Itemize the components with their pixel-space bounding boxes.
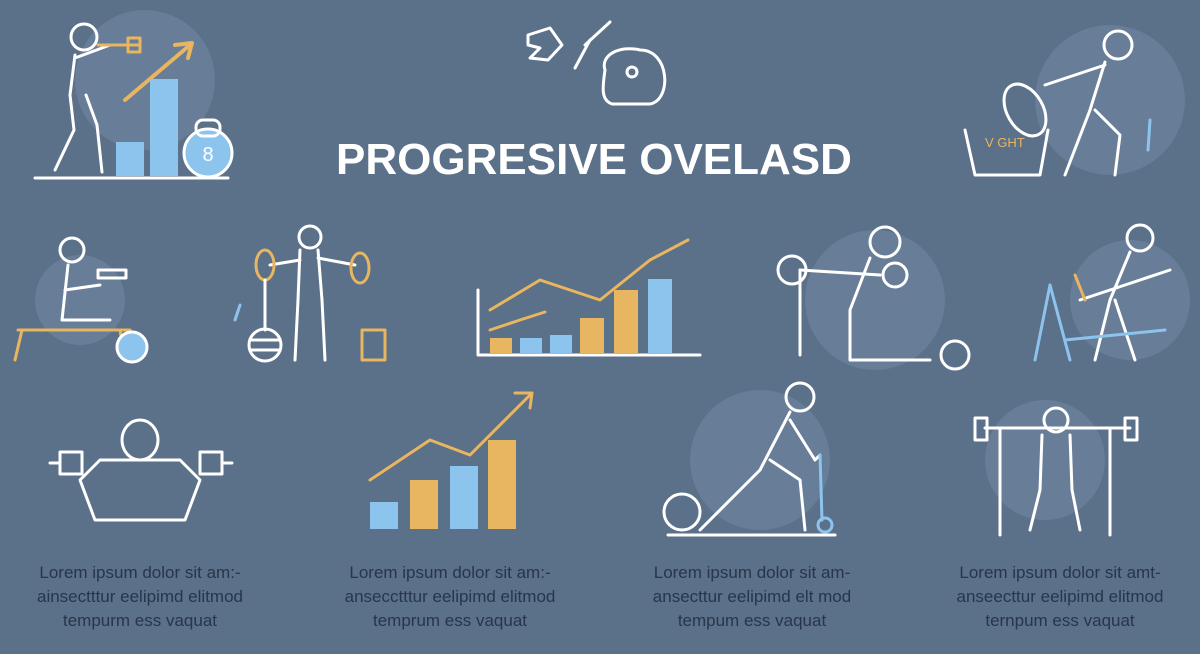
- text block 4: [957, 563, 1163, 630]
- text block 1: tempurm ess vaquat: [63, 611, 217, 630]
- icon: top center scribbles: [528, 22, 665, 104]
- text block 2: Lorem ipsum dolor sit am:-: [349, 563, 551, 582]
- text block 3: Lorem ipsum dolor sit am-: [654, 563, 850, 582]
- text block 2: ansecctttur eelipimd elitmod: [345, 587, 555, 606]
- text block 1: [37, 563, 243, 630]
- icon: lifter with rising bars: [35, 10, 232, 178]
- text block 1: ainsectttur eelipimd elitmod: [37, 587, 243, 606]
- text block 1: Lorem ipsum dolor sit am:-: [39, 563, 241, 582]
- icon: torso with dumbbells: [50, 420, 232, 520]
- text block 3: [653, 563, 851, 630]
- icon: seated curl: [15, 238, 147, 362]
- icon: top right athlete: [965, 25, 1185, 175]
- text block 3: tempum ess vaquat: [678, 611, 826, 630]
- text block 2: [345, 563, 555, 630]
- text block 4: Lorem ipsum dolor sit amt-: [959, 563, 1161, 582]
- icon: cable machine: [1035, 225, 1190, 360]
- icon: top right athlete: V GHT: [985, 135, 1025, 150]
- title: PROGRESIVE OVELASD: [336, 135, 852, 184]
- icon: squat rack: [975, 400, 1137, 535]
- icon: seated rower: [778, 227, 969, 370]
- text block 4: anseecttur eelipimd elitmod: [957, 587, 1163, 606]
- chart: center bars with trend: [478, 240, 700, 355]
- icon: lifter with rising bars: 8: [202, 144, 214, 166]
- text block 4: ternpum ess vaquat: [985, 611, 1135, 630]
- icon: pushing sled: [664, 383, 835, 535]
- icon: barbell and kettle: [235, 226, 385, 361]
- text block 3: ansecttur eelipimd elt mod: [653, 587, 851, 606]
- chart: rising bars: [370, 393, 532, 529]
- text block 2: temprum ess vaquat: [373, 611, 527, 630]
